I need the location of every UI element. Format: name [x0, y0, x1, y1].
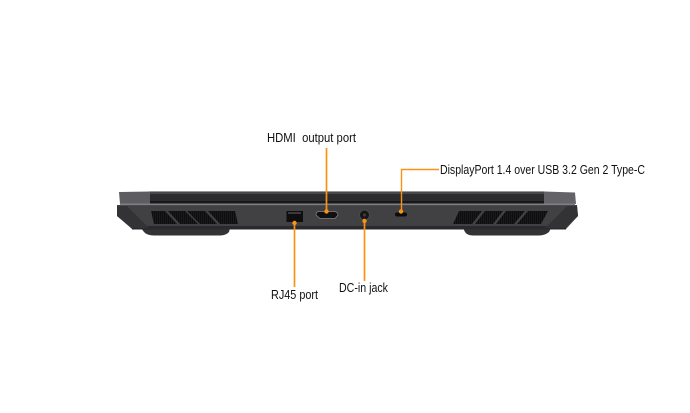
- right rubber foot: [463, 228, 551, 236]
- label: RJ45 port: RJ45 port: [271, 287, 318, 302]
- RJ45 leader line: [292, 221, 297, 287]
- USB-C port: [395, 212, 407, 216]
- left hinge: [119, 192, 150, 204]
- HDMI leader line: [324, 148, 329, 214]
- DisplayPort leader line: [399, 170, 439, 214]
- DC-in jack: [360, 210, 370, 220]
- RJ45 port: [286, 211, 303, 222]
- HDMI port: [316, 212, 338, 218]
- label: HDMI output port: HDMI output port: [267, 130, 356, 145]
- right end cap: [545, 206, 578, 228]
- right hinge: [544, 192, 576, 204]
- label: DC-in jack: DC-in jack: [339, 280, 388, 295]
- left end cap: [117, 206, 149, 228]
- chassis body: [117, 205, 578, 229]
- label: DisplayPort: DisplayPort 1.4 over USB 3.2 Gen 2 Type-C: [440, 162, 645, 177]
- left rubber foot: [141, 228, 230, 236]
- DC-in leader line: [362, 219, 367, 281]
- lid strip: [148, 192, 546, 204]
- laptop rear view: [117, 192, 578, 236]
- right vent: [453, 211, 548, 224]
- left vent: [151, 211, 238, 224]
